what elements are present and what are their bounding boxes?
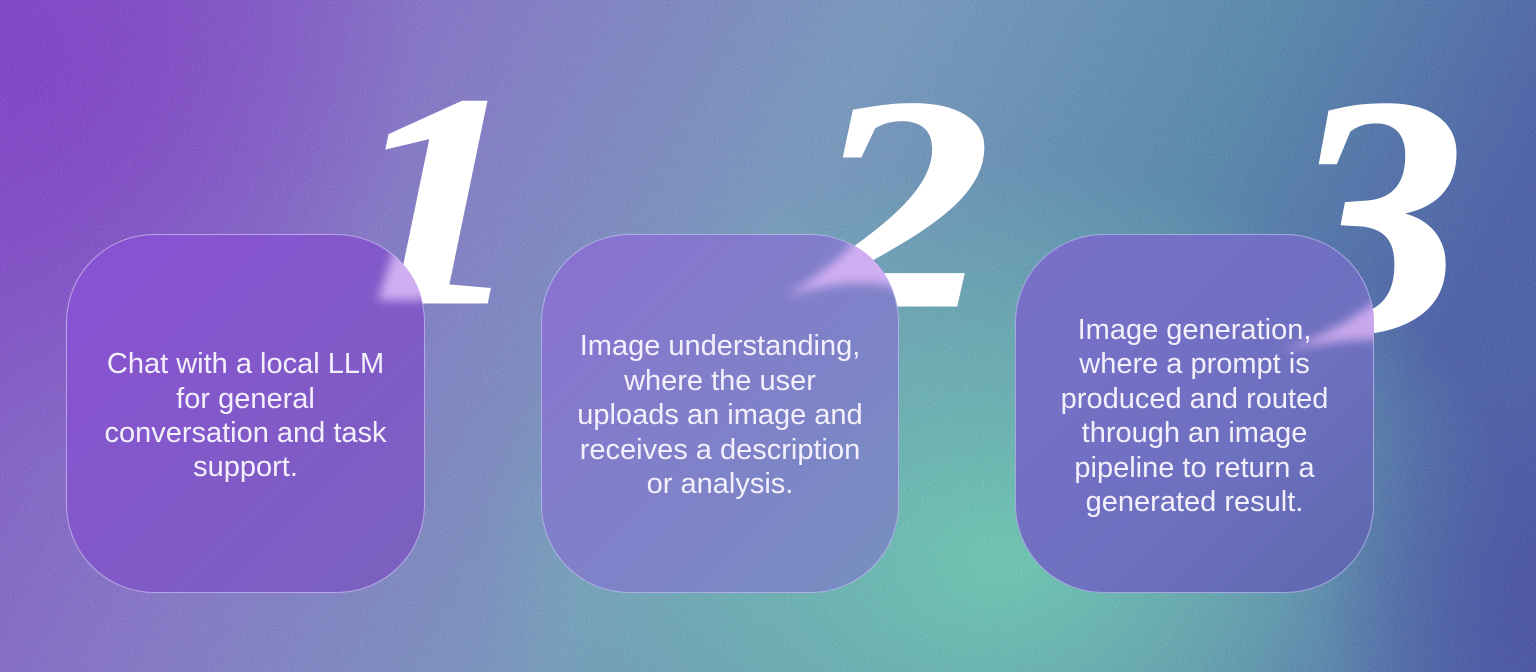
text: card 2 description: where the user [623,365,816,397]
text: card 2 description: receives a description [580,434,860,466]
highlight: blurred numeral 2 [788,242,893,298]
text: card 3 description: generated result. [1086,486,1303,518]
text: card 3 description: through an image [1082,417,1307,449]
text: card 2 description: or analysis. [647,468,793,500]
text: card 1 description: Chat with a local LLM [107,348,384,380]
text: card 1 description: for general [176,383,315,415]
highlight: blurred numeral 3 [1284,298,1374,354]
text: card 2 description [577,330,863,500]
text: card 3 description [1061,314,1328,518]
text: card 2 description: uploads an image and [577,399,863,431]
text: card 2 description: Image understanding, [580,330,860,362]
numeral 1: 1 [347,33,525,368]
card 3 [1016,234,1385,592]
text: card 3 description: produced and routed [1061,383,1328,415]
text: card 1 description: conversation and task [104,417,387,449]
text: card 3 description: Image generation, [1078,314,1311,346]
text: card 3 description: pipeline to return a [1074,452,1315,484]
highlight: blurred numeral 1 [374,252,422,306]
card 1 [66,234,440,592]
text: card 1 description: support. [193,451,298,483]
text: card 3 description: where a prompt is [1078,348,1310,380]
card 2 [542,234,910,592]
numeral 3: 3 [1282,27,1464,404]
numeral 2: 2 [804,36,991,371]
text: card 1 description [104,348,387,483]
